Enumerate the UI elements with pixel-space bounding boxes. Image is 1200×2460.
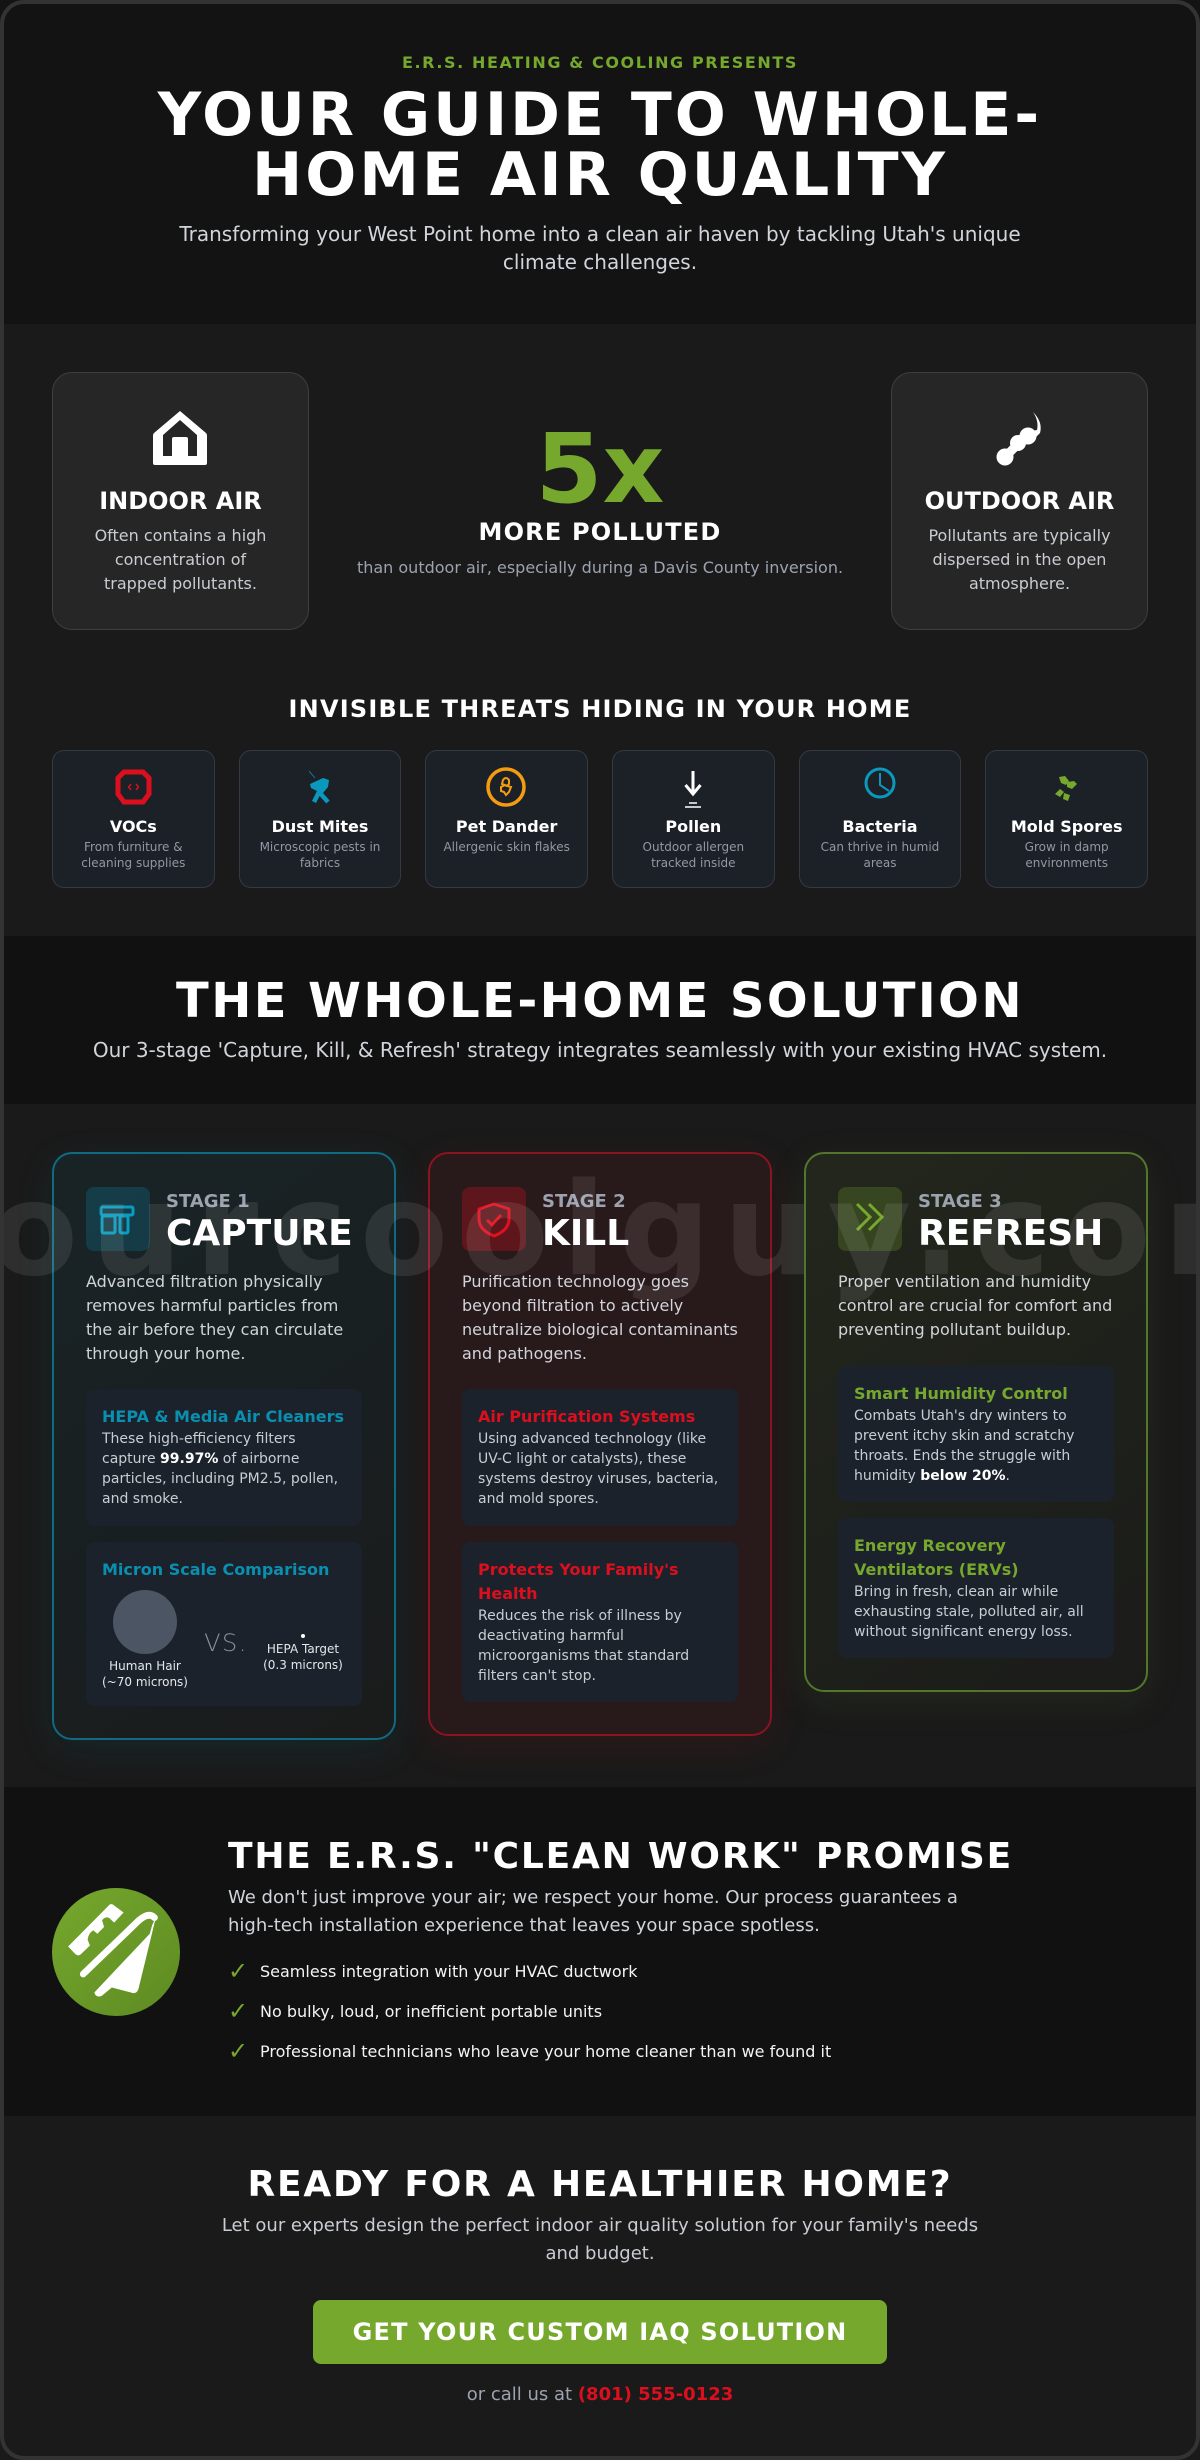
sub-panel: protects family: Reduces the risk of illness by — [478, 1608, 682, 1624]
sub-panel: protects family: deactivating harmful — [478, 1628, 624, 1644]
sub-panel: air purification: Using advanced technology (like — [478, 1431, 706, 1447]
human hair label: Human Hair — [109, 1659, 181, 1673]
stage description: removes harmful particles from — [86, 1296, 338, 1315]
sub-panel: protects family: Health — [478, 1584, 538, 1603]
subtitle: climate challenges. — [503, 250, 697, 274]
heading: THE WHOLE-HOME SOLUTION — [176, 973, 1024, 1029]
threat title: Bacteria — [842, 817, 918, 836]
stage name: CAPTURE — [166, 1213, 353, 1254]
stage description: control are crucial for comfort and — [838, 1296, 1112, 1315]
threat description: cleaning supplies — [81, 856, 185, 870]
check: ✓ — [228, 1997, 248, 2025]
text: Let our experts design the perfect indoor air quality solution for your family's needs — [222, 2215, 978, 2236]
sub-panel: smart humidity: throats. Ends the struggle with — [854, 1448, 1070, 1464]
sub-panel: air purification: systems destroy viruses, bacteria, — [478, 1471, 718, 1487]
item text: Professional technicians who leave your home cleaner than we found it — [260, 2042, 831, 2061]
stage name: REFRESH — [918, 1213, 1103, 1254]
stage label: STAGE 1 — [166, 1191, 250, 1212]
section: call to action — [0, 2116, 1200, 2460]
text: indoor air — [95, 526, 266, 593]
list item 1 — [228, 1957, 638, 1985]
threat description — [821, 840, 939, 870]
text — [228, 1887, 958, 1936]
threat description: Can thrive in humid — [821, 840, 939, 854]
threat description: Allergenic skin flakes — [443, 840, 570, 854]
icon: VOC hexagon — [116, 770, 152, 804]
threat description: fabrics — [300, 856, 340, 870]
hepa label — [263, 1642, 343, 1672]
hepa label: HEPA Target — [267, 1642, 339, 1656]
sub-panel: smart humidity — [838, 1366, 1114, 1502]
panel: stage 2 kill — [428, 1152, 772, 1736]
sub-panel: HEPA cleaners: particles, including PM2.5, pollen, — [102, 1471, 338, 1487]
sub-panel: HEPA cleaners: and smoke. — [102, 1491, 183, 1507]
sub-panel: HEPA cleaners: These high-efficiency filters — [102, 1431, 295, 1447]
sub-panel: protects family: Protects Your Family's — [478, 1560, 679, 1579]
section: comparison and threats — [0, 324, 1200, 936]
stage description: Proper ventilation and humidity — [838, 1272, 1091, 1291]
sub-panel: air purification — [462, 1389, 738, 1526]
hepa label: (0.3 microns) — [263, 1658, 343, 1672]
list item 2 — [228, 1997, 602, 2025]
text: high-tech installation experience that leaves your space spotless. — [228, 1915, 820, 1936]
sub-panel: energy recovery: Bring in fresh, clean air while — [854, 1584, 1058, 1600]
phone line: or call us at (801) 555-0123 — [467, 2384, 733, 2405]
icon: broom badge — [52, 1888, 180, 2016]
sub-panel: energy recovery — [838, 1518, 1114, 1658]
text — [222, 2215, 978, 2264]
threat card: dust mites — [239, 750, 401, 888]
threat description — [260, 840, 380, 870]
vs: VS. — [204, 1629, 248, 1657]
panel: stage 3 refresh — [804, 1152, 1148, 1692]
human hair label — [102, 1659, 188, 1689]
heading: THE E.R.S. "CLEAN WORK" PROMISE — [228, 1836, 1013, 1877]
hepa dot — [301, 1634, 305, 1638]
threat card: pollen — [612, 750, 775, 888]
threat card: mold spores — [985, 750, 1148, 888]
threat title: Pollen — [665, 817, 721, 836]
human hair circle — [113, 1590, 177, 1654]
text: outdoor air: atmosphere. — [969, 574, 1070, 593]
text: indoor air: concentration of — [115, 550, 246, 569]
item text: Seamless integration with your HVAC ductwork — [260, 1962, 637, 1981]
stat: 5x more polluted — [357, 413, 843, 577]
sub-panel: energy recovery: Energy Recovery — [854, 1536, 1006, 1555]
section: whole-home solution banner — [0, 936, 1200, 1104]
title — [157, 80, 1042, 210]
sub-panel: smart humidity: Combats Utah's dry winters to — [854, 1408, 1067, 1424]
title: YOUR GUIDE TO WHOLE- — [158, 80, 1042, 150]
text: and budget. — [545, 2243, 655, 2264]
text: indoor air: trapped pollutants. — [104, 574, 257, 593]
big number: 5x — [536, 413, 664, 525]
sub-panel: micron comparison: Micron Scale Comparison — [102, 1560, 329, 1579]
heading: outdoor air: OUTDOOR AIR — [925, 487, 1114, 515]
sub-panel: HEPA cleaners: capture 99.97% of airborne — [102, 1451, 299, 1467]
panel: indoor air — [52, 372, 309, 630]
sub-panel: protects family: filters can't stop. — [478, 1668, 596, 1684]
stage description: Advanced filtration physically — [86, 1272, 323, 1291]
sub-panel: HEPA cleaners: HEPA & Media Air Cleaners — [102, 1407, 344, 1426]
threat description: Outdoor allergen — [643, 840, 744, 854]
threat title: Pet Dander — [456, 817, 557, 836]
icon: pollen arrow — [684, 771, 702, 808]
subtitle: Transforming your West Point home into a clean air haven by tackling Utah's unique — [179, 222, 1021, 246]
stage label: STAGE 3 — [918, 1191, 1002, 1212]
threat title: Mold Spores — [1011, 817, 1122, 836]
list item 3 — [228, 2037, 831, 2065]
check: ✓ — [228, 2037, 248, 2065]
text: outdoor air: dispersed in the open — [933, 550, 1106, 569]
sub-panel: air purification: Air Purification Systems — [478, 1407, 695, 1426]
stage description — [462, 1272, 738, 1363]
threat description — [643, 840, 744, 870]
sub-panel: energy recovery: exhausting stale, polluted air, all — [854, 1604, 1084, 1620]
stage label: STAGE 2 — [542, 1191, 626, 1212]
title: HOME AIR QUALITY — [252, 140, 948, 210]
sub-panel: protects family: microorganisms that standard — [478, 1648, 689, 1664]
sub-panel: energy recovery: Ventilators (ERVs) — [854, 1560, 1019, 1579]
section: three stages — [0, 1104, 1200, 1787]
threat description — [81, 840, 185, 870]
stage description: neutralize biological contaminants — [462, 1320, 738, 1339]
panel: outdoor air — [891, 372, 1148, 630]
stat label: MORE POLLUTED — [478, 518, 722, 546]
stage description: through your home. — [86, 1344, 245, 1363]
icon: bacteria clock — [864, 768, 896, 798]
sub-panel: smart humidity: Smart Humidity Control — [854, 1384, 1068, 1403]
stage description: preventing pollutant buildup. — [838, 1320, 1071, 1339]
icon: dust mite — [308, 770, 330, 804]
icon: shield — [462, 1187, 526, 1251]
threat description: areas — [863, 856, 896, 870]
threat card: VOCs — [52, 750, 215, 888]
item text: No bulky, loud, or inefficient portable units — [260, 2002, 602, 2021]
threat description — [1025, 840, 1109, 870]
stage description: and pathogens. — [462, 1344, 587, 1363]
threat description: Microscopic pests in — [260, 840, 380, 854]
stage description: beyond filtration to actively — [462, 1296, 683, 1315]
icon: filter — [86, 1187, 150, 1251]
sub-panel: air purification: and mold spores. — [478, 1491, 599, 1507]
sub-panel: smart humidity: humidity below 20%. — [854, 1468, 1010, 1484]
text: We don't just improve your air; we respect your home. Our process guarantees a — [228, 1887, 958, 1908]
stage description: Purification technology goes — [462, 1272, 689, 1291]
stage description — [86, 1272, 343, 1363]
stage description: the air before they can circulate — [86, 1320, 343, 1339]
subtitle — [179, 222, 1021, 274]
heading: READY FOR A HEALTHIER HOME? — [247, 2164, 952, 2205]
icon: house — [153, 411, 207, 465]
text: outdoor air — [928, 526, 1111, 593]
threat description: tracked inside — [651, 856, 736, 870]
button — [313, 2300, 887, 2364]
threat description: Grow in damp — [1025, 840, 1109, 854]
threat card: bacteria — [799, 750, 961, 888]
section: clean work promise — [0, 1787, 1200, 2116]
icon: mold spores — [1055, 776, 1077, 801]
eyebrow: E.R.S. HEATING & COOLING PRESENTS — [402, 53, 798, 72]
icon: outdoor plume — [996, 412, 1041, 466]
threat description: environments — [1025, 856, 1108, 870]
threat description: From furniture & — [84, 840, 183, 854]
text: indoor air: Often contains a high — [95, 526, 266, 545]
sub-panel: HEPA cleaners — [86, 1389, 362, 1526]
text: outdoor air: Pollutants are typically — [928, 526, 1111, 545]
icon: chevrons — [838, 1187, 902, 1251]
header — [0, 0, 1200, 324]
heading: indoor air: INDOOR AIR — [99, 487, 262, 515]
button: GET YOUR CUSTOM IAQ SOLUTION — [353, 2318, 847, 2346]
sub-panel: micron comparison — [86, 1542, 362, 1706]
human hair label: (~70 microns) — [102, 1675, 188, 1689]
sub-panel: air purification: UV-C light or catalysts), these — [478, 1451, 686, 1467]
threat card: pet dander — [425, 750, 588, 888]
stat caption: than outdoor air, especially during a Davis County inversion. — [357, 558, 843, 577]
sub-panel: protects family — [462, 1542, 738, 1702]
stage description — [838, 1272, 1112, 1339]
heading: invisible threats: INVISIBLE THREATS HIDING IN YOUR HOME — [289, 695, 911, 723]
subheading: Our 3-stage 'Capture, Kill, & Refresh' strategy integrates seamlessly with your existing HVAC system. — [93, 1038, 1107, 1062]
threat title: Dust Mites — [272, 817, 368, 836]
sub-panel: smart humidity: prevent itchy skin and scratchy — [854, 1428, 1074, 1444]
threat title: VOCs — [110, 817, 157, 836]
icon: pet dander — [486, 767, 526, 807]
panel: stage 1 capture — [52, 1152, 396, 1740]
stage name: KILL — [542, 1213, 629, 1254]
sub-panel: energy recovery: without significant energy loss. — [854, 1624, 1073, 1640]
check: ✓ — [228, 1957, 248, 1985]
